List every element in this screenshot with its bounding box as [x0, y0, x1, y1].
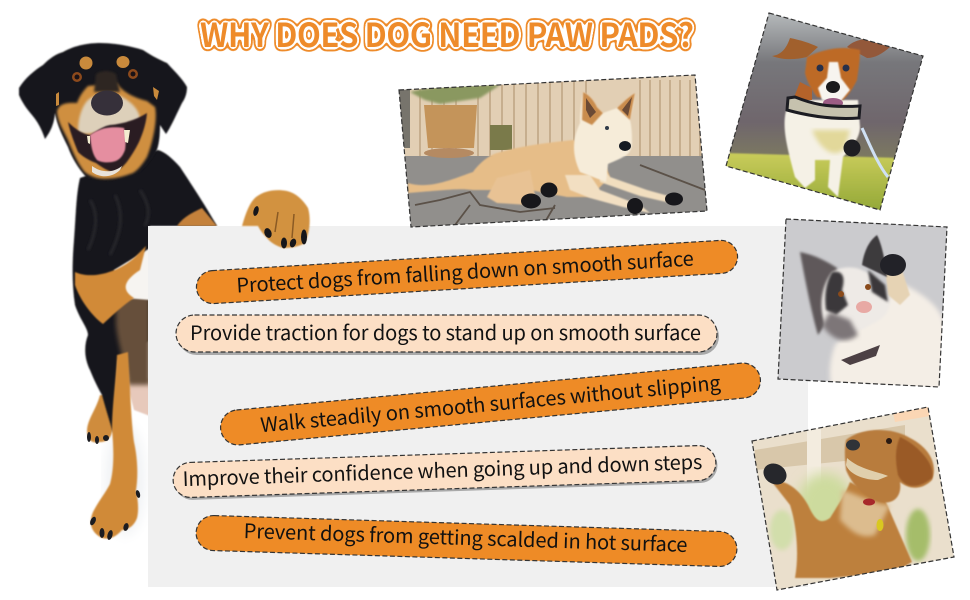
head lower lip — [92, 166, 122, 176]
head nose — [91, 90, 123, 116]
head eye right — [128, 69, 138, 79]
dog body — [73, 150, 217, 433]
dog rear fur — [116, 270, 150, 385]
retriever arm and body — [772, 481, 912, 578]
dog front paw claws — [87, 432, 141, 540]
photo: running beagle — [720, 10, 930, 215]
head tongue — [90, 127, 126, 162]
paw fur — [242, 190, 310, 248]
dog hind paw — [87, 395, 113, 442]
head muzzle — [78, 94, 140, 134]
dog floor shadow — [105, 425, 145, 535]
dog head — [19, 43, 187, 181]
head nose bridge — [94, 71, 120, 92]
dog paw over panel edge — [242, 190, 310, 248]
head eyebrow tan right — [116, 56, 130, 68]
lying dog front leg far — [600, 173, 667, 203]
dog belly — [126, 378, 150, 416]
pill: prevent scalding — [196, 514, 737, 567]
lying dog body — [408, 140, 610, 197]
photo: dog lying on patio — [395, 70, 715, 231]
pill: provide traction: Provide traction for dogs to stand up on smooth surface — [190, 317, 701, 346]
dog fur highlights — [88, 190, 148, 255]
head teeth — [87, 130, 130, 144]
head eyebrow tan — [80, 56, 92, 70]
photo: golden retriever raising paw — [751, 406, 955, 591]
head eye left — [72, 72, 82, 82]
title: WHY DOES DOG NEED PAW PADS? — [200, 10, 694, 57]
paw claws — [252, 206, 307, 248]
pill: walk steadily: Walk steadily on smooth surfaces without slipping — [259, 367, 722, 438]
lying dog hind leg — [487, 170, 535, 205]
pill: prevent scalding: Prevent dogs from getting scalded in hot surface — [243, 515, 688, 558]
paw toe lines — [275, 212, 294, 238]
panel: benefits background — [148, 226, 808, 587]
retriever head — [845, 430, 934, 503]
photo: border collie showing paw — [775, 215, 955, 390]
pill: provide traction — [176, 315, 719, 355]
pill: protect from falling: Protect dogs from falling down on smooth surface — [235, 243, 694, 299]
head side marks — [56, 87, 159, 106]
head black fur — [19, 43, 187, 181]
dog front leg — [91, 352, 138, 539]
lying dog head and chest — [574, 92, 635, 182]
pill: improve confidence: Improve their confidence when going up and down steps — [182, 446, 703, 492]
retriever chest fur — [840, 490, 890, 536]
head mouth — [68, 113, 147, 172]
dog white chest — [114, 248, 150, 300]
head tan face — [57, 83, 156, 179]
main dog: rottweiler mix — [19, 43, 217, 540]
dog chest tan patch — [75, 246, 146, 324]
dog shoulder tan — [177, 208, 217, 226]
lying dog front leg near — [565, 175, 650, 213]
